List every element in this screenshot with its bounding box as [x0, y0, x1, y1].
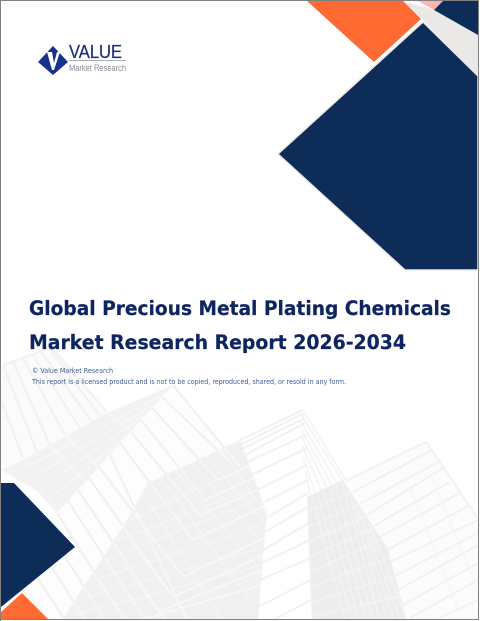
middle building narrow edge: [300, 410, 347, 497]
logo word Market Research: Market Research: [69, 63, 126, 73]
left building shaded band: [1, 385, 173, 513]
orange parallelogram: [307, 1, 421, 62]
large navy diamond: [278, 22, 478, 270]
title: Global Precious Metal Plating Chemicals: [29, 297, 451, 320]
top right decorative shapes: [278, 1, 478, 270]
copyright and licence text: [31, 367, 346, 386]
orange triangle: [1, 593, 49, 620]
logo diamond with V: [38, 46, 68, 75]
copyright and licence text: © Value Market Research: [32, 367, 113, 375]
logo: [38, 42, 126, 75]
logo rule: [69, 60, 126, 61]
left building top facade: [1, 347, 107, 470]
background building illustration: [1, 347, 478, 620]
middle building floors: [240, 410, 311, 620]
logo word VALUE: VALUE: [69, 42, 122, 62]
title: Market Research Report 2026-2034: [29, 331, 406, 354]
center building grey grid: [64, 440, 266, 619]
title: [29, 297, 451, 354]
right building floors: [347, 442, 478, 620]
navy corner: [434, 1, 478, 35]
pink triangle: [418, 1, 444, 10]
copyright and licence text: This report is a licensed product and is not to be copied, reproduced, shared, or resold in any form.: [31, 378, 346, 386]
center building white columns: [1, 385, 240, 620]
light grey wedge: [403, 1, 478, 76]
navy diamond: [1, 483, 75, 607]
right tower grey facade: [307, 480, 407, 620]
bottom left decorative shapes: [1, 483, 75, 620]
